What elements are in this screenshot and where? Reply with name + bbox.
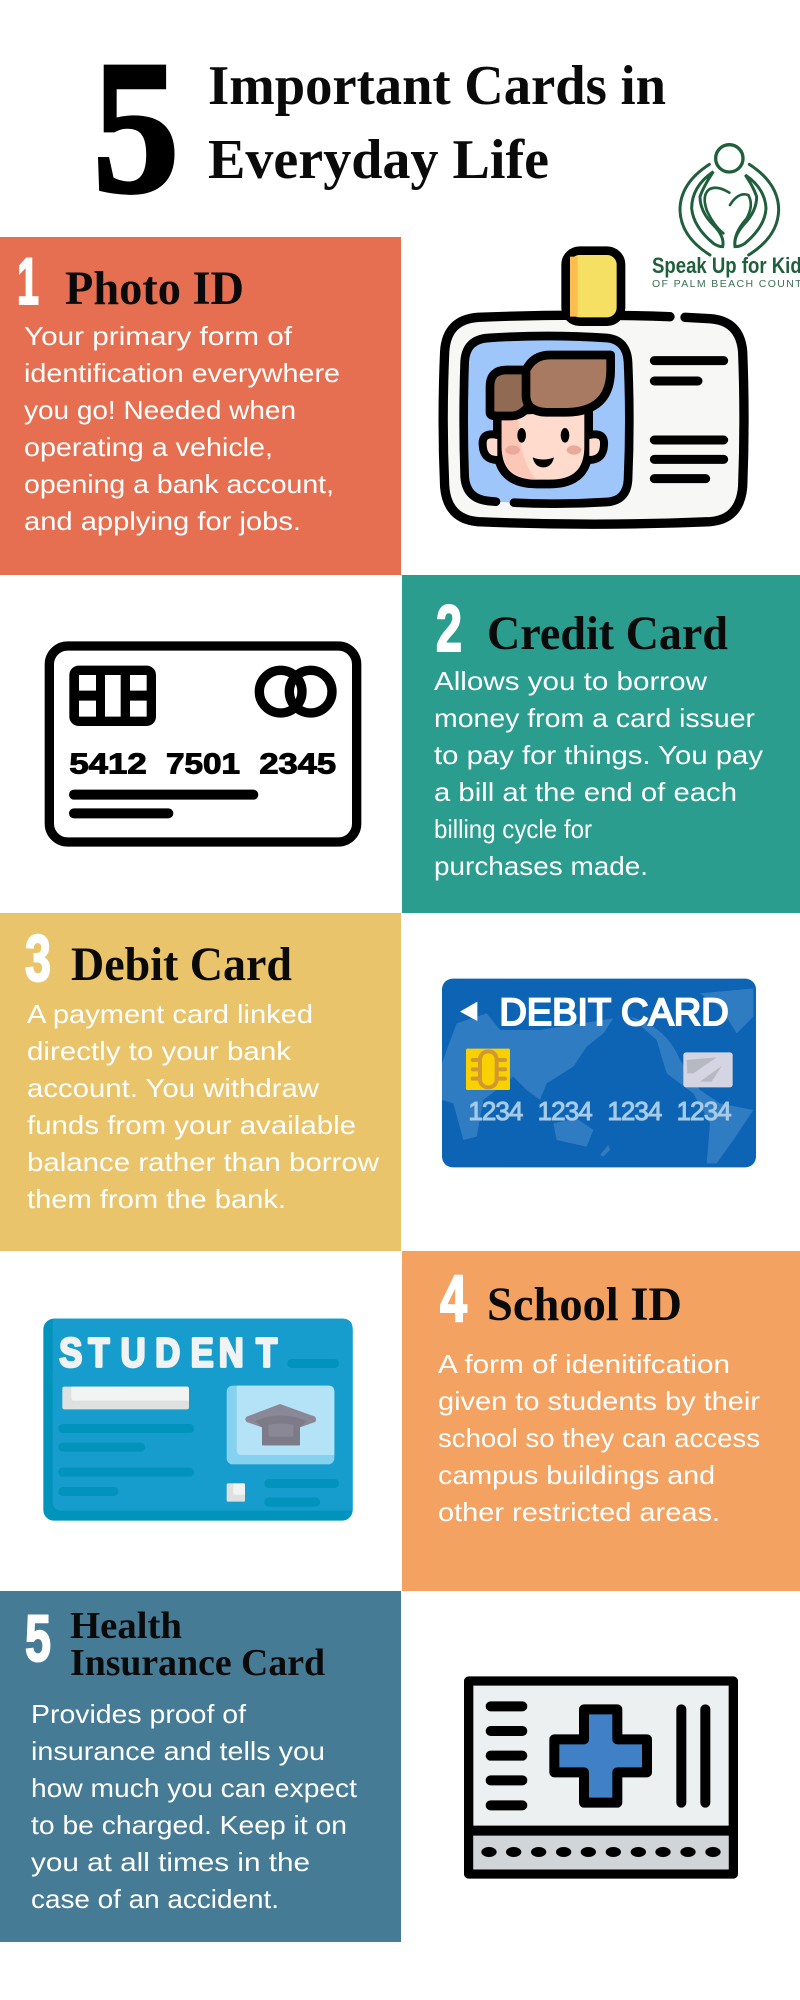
description: credit card xyxy=(434,666,763,881)
description: school id: school so they can access xyxy=(438,1423,760,1453)
heading: credit card: Credit Card xyxy=(487,607,728,660)
title xyxy=(93,23,666,233)
description: school id xyxy=(438,1349,760,1527)
icon: credit card: 7501 xyxy=(166,748,240,780)
icon: debit card: 1234 xyxy=(607,1096,662,1126)
panel: health insurance card xyxy=(0,1591,401,1942)
number 4: 4 xyxy=(440,1261,467,1335)
description: debit card: funds from your available xyxy=(27,1110,356,1140)
panel: school id xyxy=(402,1251,800,1591)
description: school id: campus buildings and xyxy=(438,1460,715,1490)
description: debit card: A payment card linked xyxy=(27,999,313,1029)
icon: credit card: 5412 xyxy=(69,748,147,780)
number 3: 3 xyxy=(25,921,51,995)
description: credit card: a bill at the end of each xyxy=(434,777,737,807)
description: school id: given to students by their xyxy=(438,1386,760,1416)
description: credit card: Allows you to borrow xyxy=(434,666,707,696)
description: school id: other restricted areas. xyxy=(438,1497,720,1527)
description: photo id: Your primary form of xyxy=(24,321,293,351)
heading: photo id: Photo ID xyxy=(65,262,244,315)
heading: debit card: Debit Card xyxy=(71,938,292,991)
logo: speak up for kids xyxy=(652,145,800,290)
description: photo id: identification everywhere xyxy=(24,358,340,388)
number 1: 1 xyxy=(17,244,39,318)
icon: debit card: 1234 xyxy=(538,1096,593,1126)
heading: health insurance card: Health xyxy=(70,1605,182,1647)
description: debit card: them from the bank. xyxy=(27,1184,286,1214)
panel: debit card xyxy=(0,913,401,1251)
icon: debit card: DEBIT CARD xyxy=(499,992,729,1034)
number 5: 5 xyxy=(25,1601,51,1675)
heading: health insurance card: Insurance Card xyxy=(70,1642,325,1684)
description: health insurance card: to be charged. Keep it on xyxy=(31,1810,347,1840)
description: debit card: account. You withdraw xyxy=(27,1073,319,1103)
panel: credit card xyxy=(402,575,800,913)
description: credit card: money from a card issuer xyxy=(434,703,755,733)
description: credit card: billing cycle for xyxy=(434,814,592,844)
icon: health card xyxy=(469,1681,733,1874)
description: credit card: to pay for things. You pay xyxy=(434,740,763,770)
description: photo id: opening a bank account, xyxy=(24,469,334,499)
heading: health insurance card xyxy=(70,1605,325,1684)
description: school id: A form of idenitifcation xyxy=(438,1349,730,1379)
description: debit card: balance rather than borrow xyxy=(27,1147,379,1177)
icon: id badge xyxy=(443,251,744,524)
icon: debit card: 1234 xyxy=(468,1096,523,1126)
number 2: 2 xyxy=(436,591,462,665)
description: health insurance card: Provides proof of xyxy=(31,1699,247,1729)
icon: credit card xyxy=(49,646,357,842)
description: credit card: purchases made. xyxy=(434,851,648,881)
description: debit card: directly to your bank xyxy=(27,1036,292,1066)
description: photo id xyxy=(24,321,340,536)
description: photo id: and applying for jobs. xyxy=(24,506,301,536)
description: health insurance card: insurance and tells you xyxy=(31,1736,325,1766)
description: health insurance card xyxy=(31,1699,358,1914)
description: health insurance card: case of an accident. xyxy=(31,1884,279,1914)
panel: photo id xyxy=(0,237,401,575)
icon: debit card xyxy=(442,979,756,1167)
description: debit card xyxy=(27,999,379,1214)
description: health insurance card: you at all times in the xyxy=(31,1847,310,1877)
title line 1: Important Cards in xyxy=(208,55,666,117)
description: photo id: operating a vehicle, xyxy=(24,432,273,462)
logo mark xyxy=(680,145,779,255)
icon: debit card: 1234 xyxy=(677,1096,732,1126)
icon: student id xyxy=(43,1319,353,1521)
icon: student id: STUDENT xyxy=(59,1330,277,1375)
big numeral 5: 5 xyxy=(93,23,179,233)
description: health insurance card: how much you can expect xyxy=(31,1773,358,1803)
icon: credit card: 2345 xyxy=(259,748,336,780)
description: photo id: you go! Needed when xyxy=(24,395,296,425)
title line 2: Everyday Life xyxy=(208,129,549,191)
heading: school id: School ID xyxy=(487,1278,682,1331)
